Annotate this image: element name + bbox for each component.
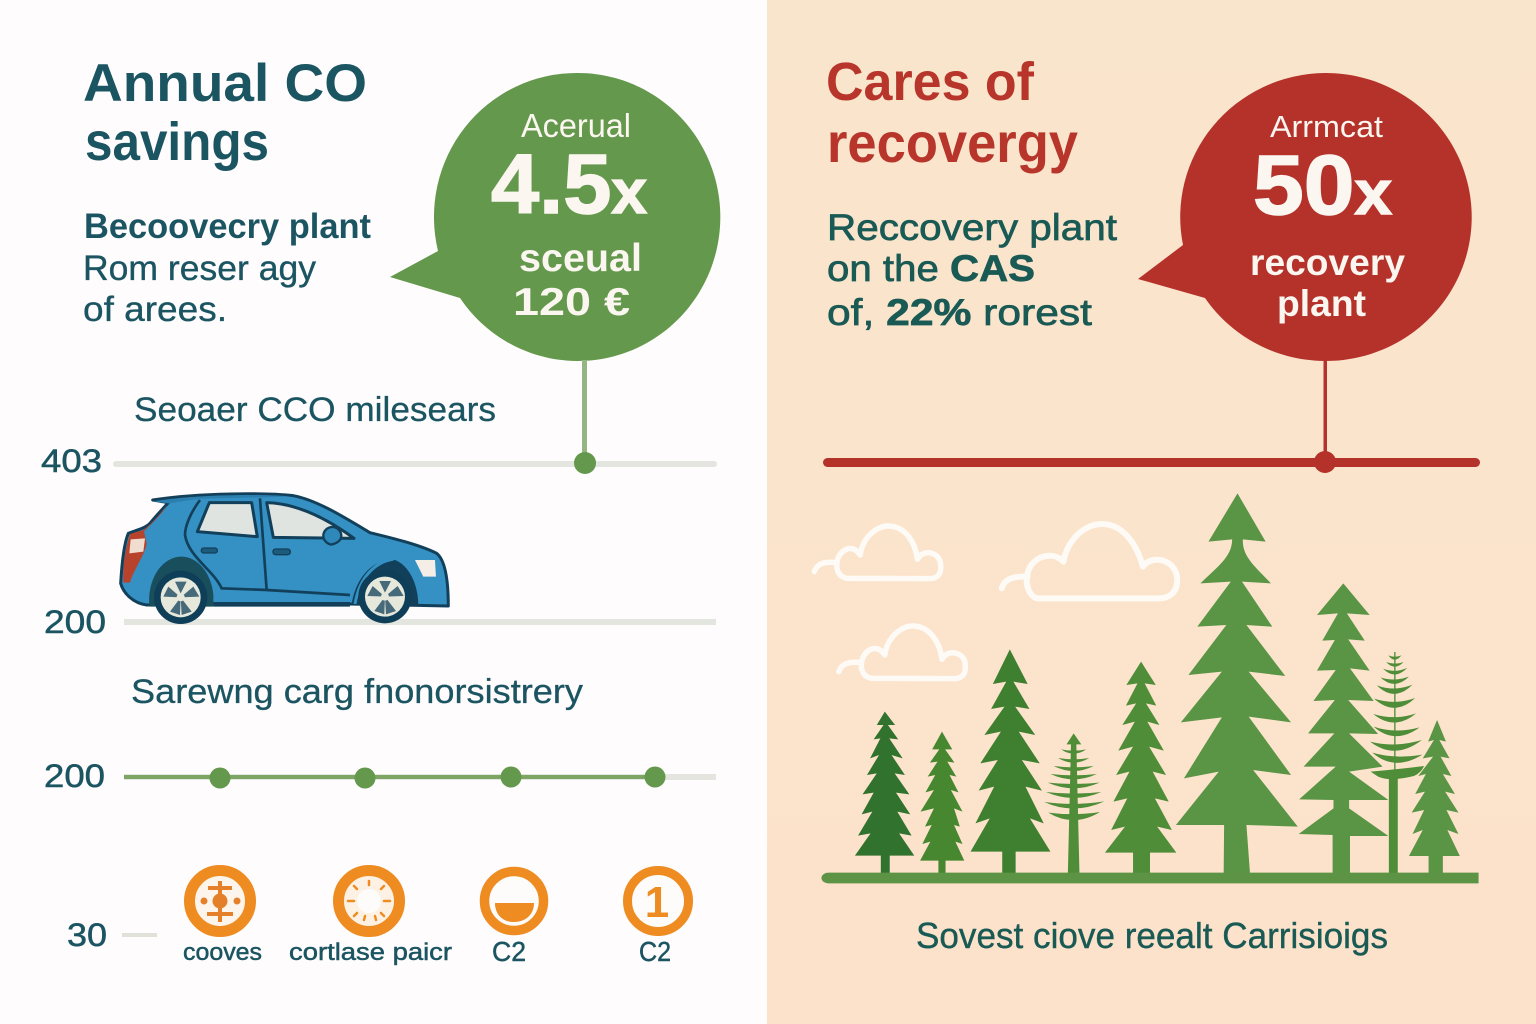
text block: recovery plant [827,207,1118,333]
title: Cares of recovergy: recovergy [827,111,1078,174]
text block: plant description [83,207,371,329]
callout: red speech bubble: 50x [1253,138,1393,232]
tick 30 [122,933,157,937]
panel: right background [767,0,1536,1024]
axis label 30: 30 [67,917,107,953]
title: Annual CO savings [83,54,367,172]
icon: orange gear symbol [190,870,250,932]
title: Cares of recovergy: Cares of [826,52,1035,112]
cloud 2 [1002,524,1177,598]
panel: annual CO savings [41,54,720,967]
icon: orange half bowl [484,872,544,930]
tree 6 tall [1176,493,1298,873]
callout: green speech bubble: Acerual [521,107,631,144]
tail light [123,504,168,583]
rear window [197,503,257,537]
title: Annual CO savings: Annual CO [83,54,367,113]
cloud 3 [839,626,965,679]
car body [121,494,448,606]
connector: red stem [1324,360,1327,462]
axis label 200 lower: 200 [44,758,105,794]
axis label 403: 403 [41,443,102,479]
icon: orange number one [628,870,688,932]
tail light highlight [129,538,145,553]
marker dot [574,452,596,474]
heading: milestones: Seoaer CCO milesears [134,391,496,429]
ground line [821,873,1479,883]
tree 2 [920,732,964,873]
tree 4 fern [1044,733,1104,873]
icon labels: C2 [639,936,671,967]
icon: orange number one: 1 [645,878,669,927]
door lines [185,498,350,595]
icon labels: cortlase paicr [289,939,452,966]
mirror [323,527,341,544]
callout: red speech bubble: recovery [1250,242,1405,283]
text block: recovery plant: Reccovery plant [827,207,1118,248]
text block: recovery plant: of, 22% rorest [827,292,1093,333]
callout: red speech bubble [1138,73,1472,361]
text block: recovery plant: on the CAS [827,248,1035,289]
panel: left background [0,0,767,1024]
red marker dot [1314,451,1336,473]
callout: red speech bubble: Arrmcat [1270,109,1383,144]
callout: green speech bubble: 4.5x [491,137,648,231]
callout: red speech bubble: plant [1277,283,1366,324]
text block: plant description: Becoovecry plant [84,207,371,246]
heading: saving category: Sarewng carg fnonorsistrery [131,673,583,711]
axis label 200 upper: 200 [44,604,106,640]
tree 1 dark [855,712,914,873]
tree 3 [971,649,1050,873]
callout: green speech bubble [390,73,720,361]
tree 8 fern [1370,652,1424,873]
title: Annual CO savings: savings [85,112,269,172]
illustration: forest and clouds [814,493,1479,883]
sill [213,602,350,607]
icon: orange sun symbol [338,870,400,932]
icon: blue car [121,494,448,624]
roof strip [153,495,292,503]
connector: bubble to axis [582,360,587,463]
dotted timeline [124,766,716,788]
tree 7 [1299,583,1388,873]
tree 5 [1105,662,1176,873]
text block: plant description: Rom reser agy [83,249,316,288]
icon labels [183,936,671,967]
door handles [201,548,217,553]
rear wheel [149,557,213,624]
callout: green speech bubble: 120 € [513,281,630,324]
axis line 403 [113,461,717,467]
front wheel [352,559,418,623]
tree 9 [1409,720,1460,873]
caption: forest: Sovest ciove reealt Carrisioigs [916,915,1388,956]
headlight [415,560,436,577]
title: Cares of recovergy [826,52,1078,174]
axis line 200 upper [124,619,716,625]
cloud 1 [814,526,941,579]
red axis line [823,458,1480,467]
icon labels: cooves [183,939,262,966]
text block: plant description: of arees. [83,290,227,329]
front window [267,503,354,538]
panel: cares of recovery [814,52,1480,956]
icon labels: C2 [492,936,526,967]
callout: green speech bubble: sceual [519,237,642,280]
